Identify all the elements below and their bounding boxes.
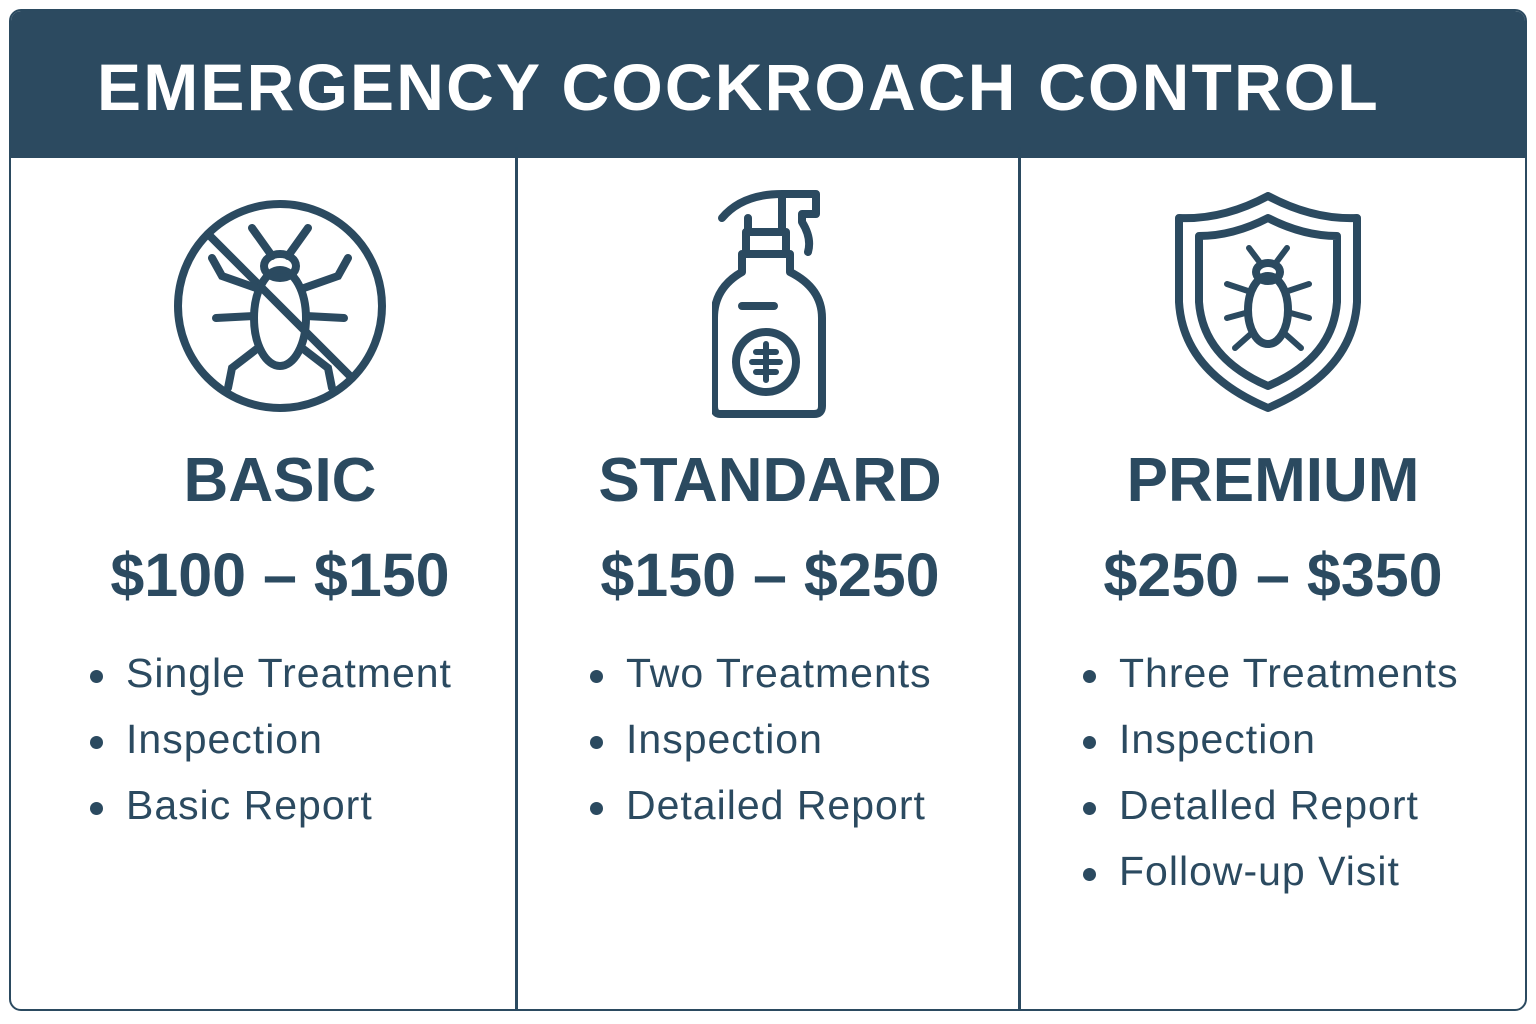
panel: premium [1083,192,1459,894]
icon: no cockroach [174,200,386,412]
feature list: Detailed Report [626,782,926,828]
heading: BASIC [184,446,376,515]
feature list: Inspection [626,716,823,762]
feature list: Detalled Report [1119,782,1419,828]
feature list: Single Treatment [126,650,452,696]
feature list [1083,650,1459,894]
title: EMERGENCY COCKROACH CONTROL [97,50,1380,124]
feature list: Inspection [126,716,323,762]
feature list: Three Treatments [1119,650,1459,696]
panel: basic [90,200,452,828]
panel: standard [590,190,942,828]
feature list: Two Treatments [626,650,932,696]
feature list: Basic Report [126,782,373,828]
icon: shield with bug [1175,192,1361,412]
heading: STANDARD [598,446,942,515]
price: $150 – $250 [600,541,940,609]
feature list: Follow-up Visit [1119,848,1400,894]
icon: spray bottle [712,190,826,418]
price: $100 – $150 [110,541,450,609]
feature list [590,650,932,828]
price: $250 – $350 [1103,541,1443,609]
feature list [90,650,452,828]
header banner [11,11,1525,158]
feature list: Inspection [1119,716,1316,762]
heading: PREMIUM [1127,446,1419,515]
